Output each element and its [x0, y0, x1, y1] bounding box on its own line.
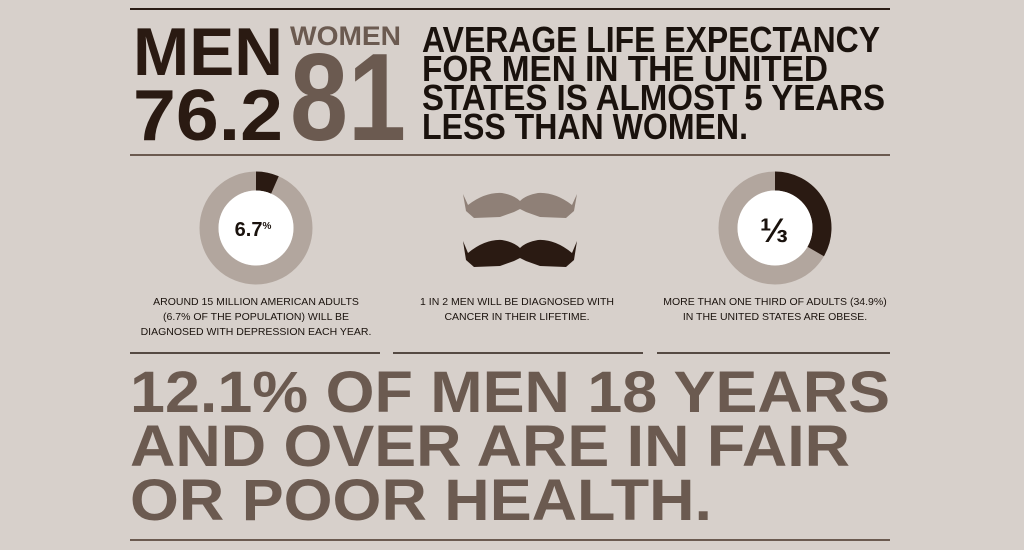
caption: cancer: CANCER IN THEIR LIFETIME. — [444, 311, 590, 323]
caption: obesity: IN THE UNITED STATES ARE OBESE. — [683, 311, 867, 323]
caption: depression: (6.7% OF THE POPULATION) WILL BE — [163, 311, 349, 323]
header: men life expectancy: MEN — [133, 14, 283, 90]
caption: obesity — [663, 296, 887, 323]
headline statement — [422, 19, 885, 147]
panel: depression donut: % — [262, 221, 271, 232]
icon: moustache grey — [463, 193, 577, 218]
caption: depression: AROUND 15 MILLION AMERICAN ADULTS — [153, 296, 359, 308]
header: women life expectancy: 81 — [290, 29, 406, 167]
big statement: fair or poor health: OR POOR HEALTH. — [130, 468, 712, 533]
headline statement: STATES IS ALMOST 5 YEARS — [422, 77, 885, 118]
header: men life expectancy: 76.2 — [133, 76, 283, 156]
panel: depression donut: 6.7 — [235, 219, 262, 241]
caption: cancer — [420, 296, 614, 323]
panel: depression donut — [209, 181, 303, 275]
header: women life expectancy: WOMEN — [290, 21, 401, 51]
headline statement: AVERAGE LIFE EXPECTANCY — [422, 19, 880, 60]
caption: depression — [141, 296, 371, 338]
headline statement: FOR MEN IN THE UNITED — [422, 48, 828, 89]
big statement: fair or poor health: AND OVER ARE IN FAIR — [130, 414, 850, 479]
big statement: fair or poor health: 12.1% OF MEN 18 YEARS — [130, 360, 890, 425]
caption: cancer: 1 IN 2 MEN WILL BE DIAGNOSED WITH — [420, 296, 614, 308]
icon: moustache dark — [463, 240, 577, 267]
big statement: fair or poor health — [130, 360, 890, 533]
panel: obesity donut: ⅓ — [760, 212, 788, 250]
headline statement: LESS THAN WOMEN. — [422, 106, 748, 147]
caption: obesity: MORE THAN ONE THIRD OF ADULTS (34.9%) — [663, 296, 887, 308]
caption: depression: DIAGNOSED WITH DEPRESSION EACH YEAR. — [141, 326, 371, 338]
header: men life expectancy — [133, 14, 283, 156]
panel: obesity donut — [728, 181, 822, 275]
